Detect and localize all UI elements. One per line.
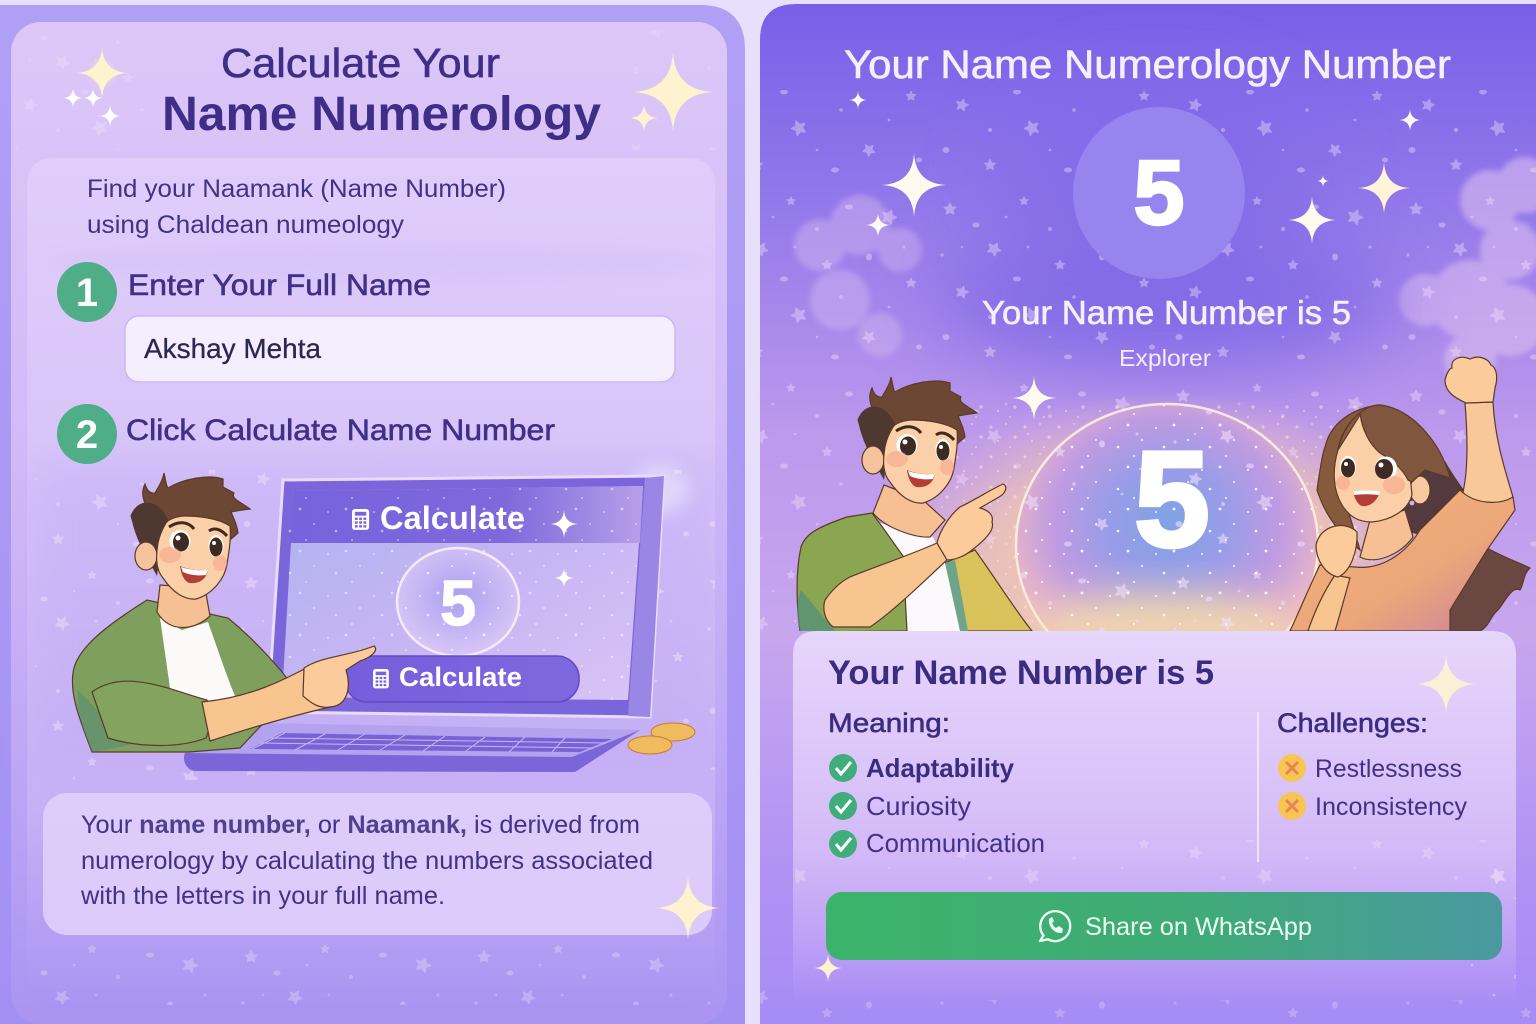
step 1 badge bbox=[57, 262, 117, 322]
meaning list: Curiosity bbox=[866, 791, 971, 821]
challenges list bbox=[1277, 708, 1467, 821]
step 2 badge: 2 bbox=[76, 413, 98, 457]
challenges list: Restlessness bbox=[1315, 755, 1462, 783]
left sparkles bbox=[63, 47, 713, 132]
name input bbox=[125, 316, 675, 382]
coins bbox=[628, 723, 695, 754]
number circle: 5 bbox=[1133, 142, 1185, 244]
heading: Your Name Numerology Number: Your Name Numerology Number bbox=[844, 43, 1451, 87]
illustration: boy pointing at orb bbox=[797, 377, 1032, 632]
illustration: boy pointing at button bbox=[72, 473, 376, 752]
card: meaning and challenges bbox=[793, 631, 1516, 1000]
calculate button: Calculate bbox=[399, 662, 522, 692]
meaning list: Meaning: bbox=[828, 708, 950, 738]
meaning list bbox=[828, 708, 1045, 858]
heading: Calculate Your Name Numerology: Calculate Your bbox=[221, 40, 500, 86]
glowing orb with number: 5 bbox=[1134, 423, 1210, 575]
step 1 label: Enter Your Full Name bbox=[128, 269, 431, 302]
calculate button bbox=[345, 656, 579, 702]
meaning list: Adaptability bbox=[866, 753, 1015, 783]
icon: whatsapp bbox=[1040, 911, 1070, 941]
whatsapp share button bbox=[826, 892, 1502, 960]
step 2 label: Click Calculate Name Number bbox=[126, 414, 555, 447]
result title: Your Name Number is 5 bbox=[982, 294, 1351, 331]
step 1 badge: 1 bbox=[76, 271, 98, 315]
keyboard base bbox=[184, 723, 640, 772]
text block: description: numerology by calculating the numbers associated bbox=[81, 847, 653, 875]
heading: Calculate Your Name Numerology bbox=[162, 40, 601, 141]
meaning list: Communication bbox=[866, 828, 1045, 858]
whatsapp share button: Share on WhatsApp bbox=[1085, 913, 1312, 941]
illustration: girl cheering bbox=[1290, 357, 1530, 631]
glowing orb with number bbox=[1014, 402, 1319, 631]
right sparkles bbox=[849, 91, 1421, 420]
challenges list: Challenges: bbox=[1277, 708, 1428, 738]
screen title: Calculate bbox=[380, 500, 525, 536]
icon: calculator bbox=[352, 509, 369, 530]
text block: description: Your name number, or Naamank, is derived from bbox=[81, 811, 640, 839]
intro text: Find your Naamank (Name Number) bbox=[87, 175, 506, 203]
card title: Your Name Number is 5 bbox=[828, 654, 1214, 692]
illustration: laptop bbox=[184, 466, 695, 772]
number circle bbox=[1073, 107, 1245, 279]
text block: description: with the letters in your full name. bbox=[80, 882, 445, 910]
number orb: 5 bbox=[440, 567, 476, 639]
heading: Calculate Your Name Numerology: Name Numerology bbox=[162, 88, 601, 141]
panel: left calculator bbox=[0, 5, 745, 1024]
text block: description bbox=[43, 793, 720, 940]
challenges list: Inconsistency bbox=[1315, 793, 1467, 821]
intro text bbox=[87, 175, 506, 239]
laptop screen bbox=[282, 486, 643, 700]
step 2 badge bbox=[57, 404, 117, 464]
intro text: using Chaldean numeology bbox=[87, 211, 405, 239]
label: Explorer: Explorer bbox=[1119, 345, 1211, 371]
panel: right result bbox=[760, 4, 1536, 1024]
name input: Akshay Mehta bbox=[144, 333, 321, 364]
number orb bbox=[397, 548, 519, 656]
